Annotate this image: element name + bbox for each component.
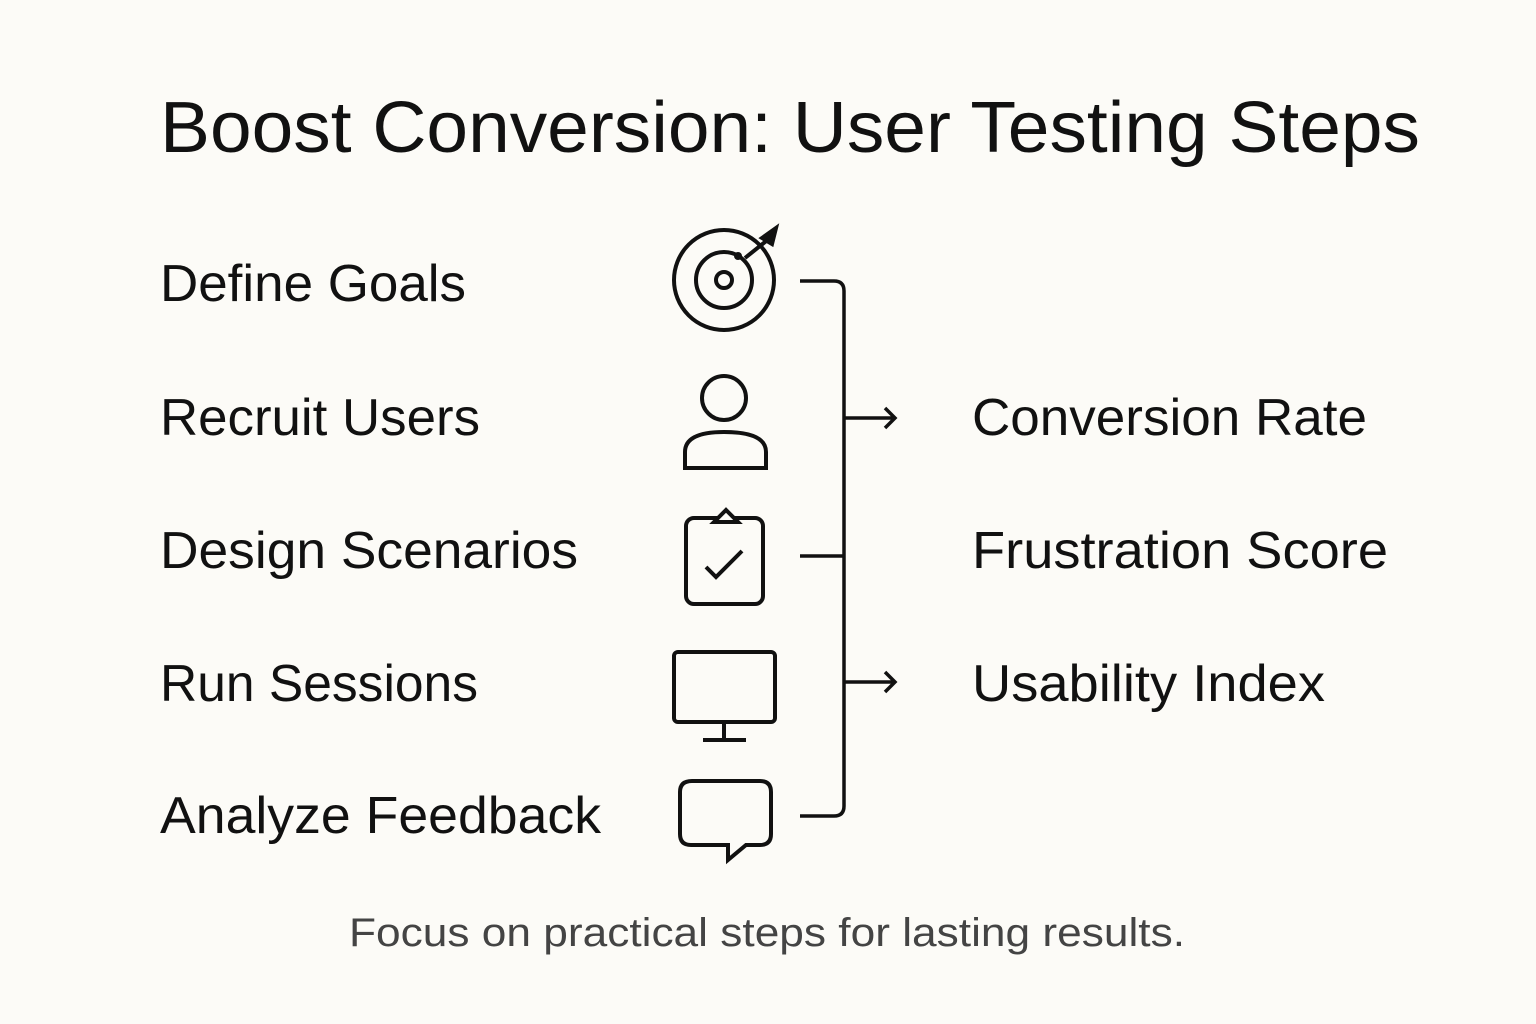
step labels: Run Sessions	[160, 655, 478, 713]
metric labels: Usability Index	[972, 655, 1325, 713]
icon: target	[674, 228, 776, 330]
step labels: Analyze Feedback	[160, 787, 602, 845]
title: Boost Conversion: User Testing Steps	[160, 88, 1420, 168]
metric labels	[972, 389, 1388, 713]
step labels: Define Goals	[160, 255, 466, 313]
metric labels: Frustration Score	[972, 522, 1388, 580]
step labels: Design Scenarios	[160, 522, 578, 580]
icon: person	[685, 376, 766, 468]
footer caption: Focus on practical steps for lasting results.	[349, 911, 1185, 955]
step labels	[160, 255, 602, 845]
icon: clipboard	[686, 510, 763, 604]
step labels: Recruit Users	[160, 389, 480, 447]
icon: monitor	[674, 652, 775, 740]
icon: speech bubble	[680, 781, 771, 860]
bracket connector with arrows	[800, 281, 895, 816]
metric labels: Conversion Rate	[972, 389, 1367, 447]
